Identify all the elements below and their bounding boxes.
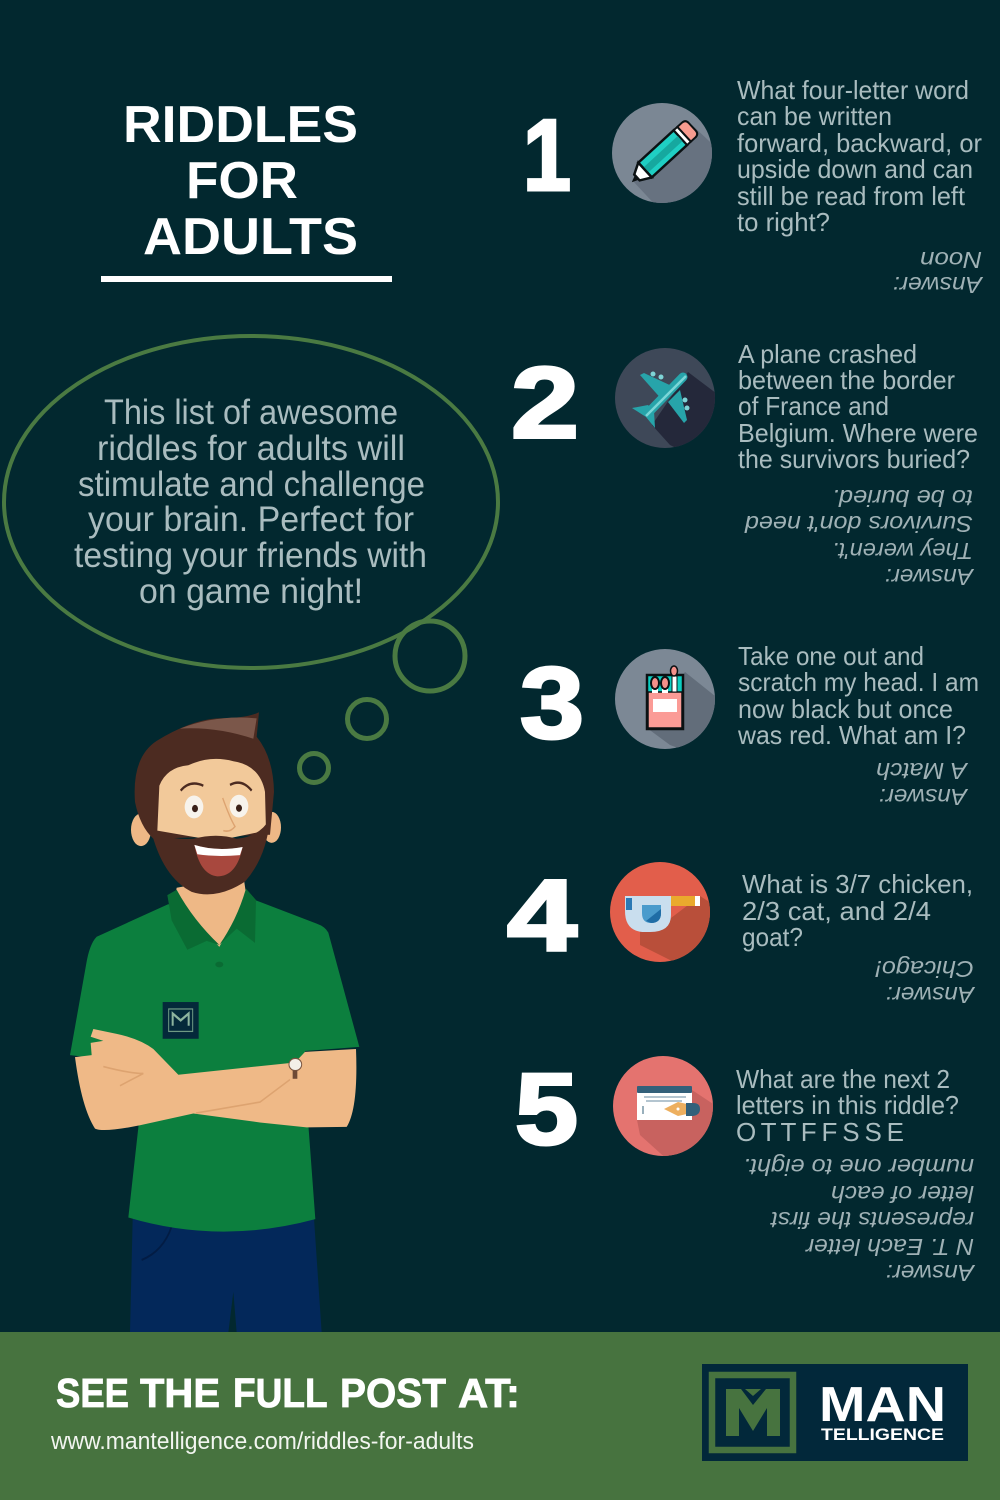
- riddle 3: now black but once: [738, 694, 953, 724]
- riddle 4: [742, 869, 973, 952]
- riddle 1: can be written: [737, 101, 892, 131]
- riddle 2: Belgium. Where were: [738, 418, 978, 448]
- footer band: AT:: [458, 1370, 520, 1416]
- answer 4: Answer:: [886, 982, 976, 1008]
- character illustration: [70, 712, 359, 1333]
- thought bubble: on game night!: [139, 572, 363, 611]
- number 2: 2: [511, 348, 579, 460]
- logo: TELLIGENCE: [821, 1425, 944, 1444]
- answer 3: Answer:: [879, 784, 969, 810]
- answer 5: represents the first: [769, 1207, 974, 1233]
- answer 5: letter of each: [831, 1181, 974, 1207]
- riddle 5: [736, 1064, 959, 1147]
- riddle 5: O T T F F S S E: [736, 1117, 904, 1147]
- number 5: 5: [515, 1054, 578, 1166]
- answer 5: Answer:: [886, 1260, 976, 1286]
- riddle 1: forward, backward, or: [737, 128, 982, 158]
- thought bubble: [4, 336, 498, 782]
- riddle 1: What four-letter word: [737, 75, 969, 105]
- answer 5: number one to eight.: [743, 1154, 974, 1180]
- logo: MAN: [819, 1378, 946, 1432]
- riddle 3: scratch my head. I am: [738, 667, 979, 697]
- footer band: FULL: [233, 1370, 327, 1416]
- answer 2: Answer:: [885, 564, 975, 590]
- answer 5: N T. Each letter: [805, 1234, 974, 1260]
- riddle 2: A plane crashed: [738, 339, 917, 369]
- answer 2: Survivors don't need: [744, 511, 973, 537]
- thought bubble: your brain. Perfect for: [88, 500, 414, 539]
- answer 2: They weren't.: [832, 538, 973, 564]
- thought bubble: This list of awesome: [104, 393, 398, 432]
- riddle 5: letters in this riddle?: [736, 1090, 959, 1120]
- footer band: [0, 1332, 1000, 1500]
- footer band: SEE: [56, 1370, 129, 1416]
- number 1: 1: [523, 100, 571, 212]
- answer 2: to be buried.: [832, 485, 973, 511]
- footer band: THE: [140, 1370, 220, 1416]
- riddle 2: of France and: [738, 391, 889, 421]
- riddle 2: [738, 339, 978, 474]
- icon: tape measure: [610, 862, 710, 962]
- answer 1: [893, 247, 984, 298]
- answer 5: [743, 1154, 976, 1286]
- riddle 4: 2/3 cat, and 2/4: [742, 896, 931, 926]
- riddle 3: Take one out and: [738, 641, 924, 671]
- title: FOR: [186, 152, 298, 210]
- riddle 2: the survivors buried?: [738, 444, 970, 474]
- answer 2: [744, 485, 975, 590]
- number 3: 3: [520, 648, 584, 760]
- icon: matchbox: [615, 649, 715, 749]
- riddle 4: What is 3/7 chicken,: [742, 869, 973, 899]
- answer 4: [874, 956, 976, 1008]
- riddle 5: What are the next 2: [736, 1064, 950, 1094]
- icon: pencil: [612, 103, 712, 203]
- icon: pen and card: [613, 1056, 713, 1156]
- riddle 3: [737, 641, 979, 750]
- title: RIDDLES: [123, 96, 358, 154]
- answer 4: Chicago!: [874, 956, 974, 982]
- footer band: www.mantelligence.com/riddles-for-adults: [50, 1428, 474, 1455]
- logo: [702, 1364, 968, 1461]
- answer 1: Answer:: [893, 272, 984, 298]
- riddle 3: was red. What am I?: [737, 720, 966, 750]
- riddle 1: upside down and can: [737, 154, 973, 184]
- thought bubble: stimulate and challenge: [78, 465, 425, 504]
- title: [101, 96, 392, 282]
- riddle 1: [737, 75, 982, 237]
- riddle 2: between the border: [738, 365, 955, 395]
- riddle 1: still be read from left: [737, 181, 966, 211]
- thought bubble: testing your friends with: [74, 536, 427, 575]
- thought bubble: riddles for adults will: [97, 429, 405, 468]
- answer 3: [876, 758, 969, 810]
- answer 1: Noon: [920, 247, 982, 273]
- answer 3: A Match: [876, 758, 969, 784]
- number 4: 4: [507, 860, 577, 972]
- icon: airplane: [615, 348, 715, 448]
- title: ADULTS: [143, 208, 358, 266]
- riddle 1: to right?: [737, 207, 830, 237]
- footer band: POST: [340, 1370, 446, 1416]
- riddle 4: goat?: [742, 922, 803, 952]
